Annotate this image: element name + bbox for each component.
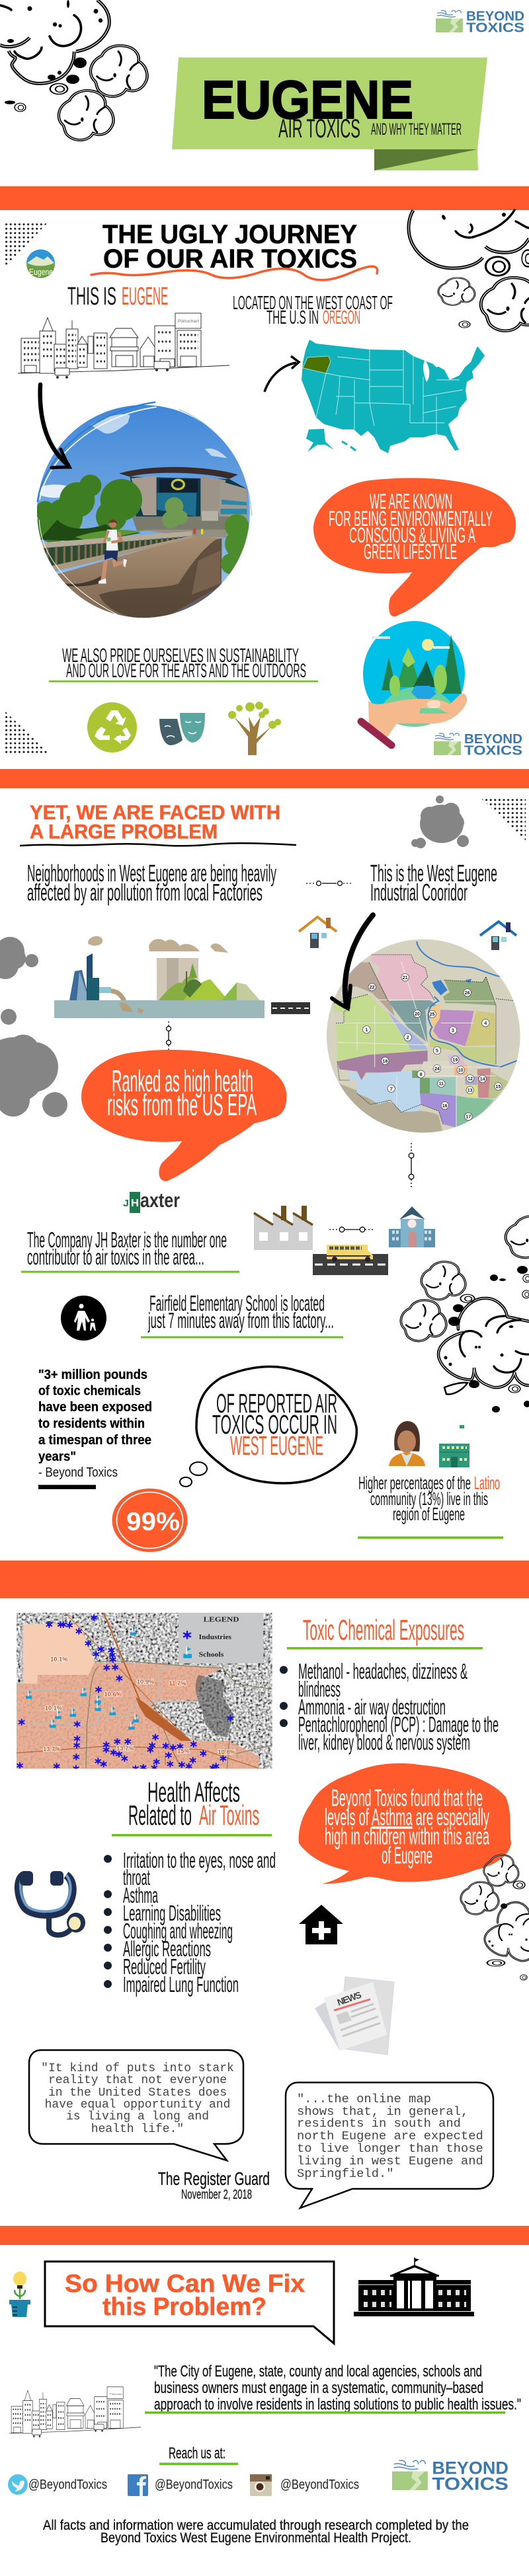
thought bubble: 99 percent of air toxics: OF REPORTED AIR	[216, 1388, 337, 1418]
attribution: The Register Guard: November 2, 2018	[181, 2188, 252, 2202]
text: neighborhoods: affected by air pollution from local Factories	[27, 879, 263, 906]
logo: City of Eugene: Eugene	[29, 267, 53, 277]
quote: city of Eugene	[154, 2363, 521, 2413]
quote: 3+ million pounds: "3+ million pounds	[38, 1368, 147, 1382]
list: health effects: Impaired Lung Function	[123, 1972, 239, 1997]
logo: JH Baxter	[123, 1189, 180, 1213]
icon: blue house	[480, 922, 516, 950]
connector	[167, 1021, 171, 1050]
green rule	[358, 1537, 503, 1539]
attribution: The Register Guard: The Register Guard	[158, 2168, 270, 2189]
orange band 2	[0, 769, 529, 788]
panel: toxic exposures and health: Air Toxins	[199, 1800, 259, 1831]
logo: Beyond Toxics top	[436, 9, 524, 36]
text: located on the west coast: OREGON	[323, 307, 360, 328]
illustration: polluting factory	[54, 936, 264, 1018]
map: industries and schools: 10.8%	[218, 1749, 236, 1755]
map: industries and schools: 13.7%	[43, 1746, 61, 1753]
wavy underline	[91, 266, 378, 280]
orange band 1	[0, 186, 529, 210]
smoke clouds top left	[0, 0, 147, 140]
map: Eugene neighborhoods: 21	[403, 976, 408, 980]
logo: Beyond Toxics bottom: BEYOND	[432, 2458, 509, 2478]
panel: toxic exposures and health	[17, 1613, 529, 2208]
callout: how can we fix: this Problem?	[102, 2293, 266, 2321]
icon: theatre masks	[159, 713, 205, 745]
text: pride in sustainability: WE ALSO PRIDE OURSELVES IN SUSTAINABILITY	[62, 645, 299, 667]
icon: green building	[439, 1425, 469, 1467]
quote: 3+ million pounds: years"	[38, 1450, 76, 1464]
text: this is eugene: THIS IS	[67, 283, 116, 311]
panel: the ugly journey: EUGENE	[122, 283, 168, 311]
heading: health affects: Related to	[128, 1800, 192, 1831]
map: Eugene neighborhoods: 20	[415, 1012, 420, 1017]
dot triangle	[5, 712, 52, 755]
logo: JH Baxter: H	[131, 1198, 139, 1209]
map: industries and schools: Schools	[199, 1652, 224, 1659]
text: instagram handle: @BeyondToxics	[280, 2478, 359, 2492]
quote box: stark reality: have equal opportunity and	[45, 2098, 230, 2112]
icon: adult and child walking	[61, 1296, 106, 1341]
heading: yet we are faced: YET, WE ARE FACED WITH	[30, 801, 280, 824]
icon: orange house	[299, 917, 337, 948]
map: Eugene neighborhoods: 15	[495, 1085, 501, 1089]
logo: City of Eugene	[26, 250, 55, 278]
wavy underline	[20, 843, 296, 846]
icon: woman	[389, 1421, 425, 1466]
quote box: stark reality: reality that not everyone	[48, 2074, 227, 2087]
thought bubble: 99 percent of air toxics: WEST EUGENE	[230, 1430, 323, 1461]
callout: how can we fix	[45, 2262, 334, 2343]
map: Eugene neighborhoods: 25	[430, 1013, 435, 1017]
green rule	[21, 1271, 239, 1272]
road segment	[271, 1002, 310, 1014]
map: Eugene neighborhoods: 1	[365, 1028, 368, 1033]
logo: Beyond Toxics: TOXICS	[464, 744, 522, 758]
quote box: stark reality: is living a long and	[66, 2110, 209, 2123]
logo: Beyond Toxics bottom	[392, 2458, 509, 2493]
illustration: cityscape: Piktochart	[178, 319, 199, 324]
quote: 3+ million pounds	[38, 1368, 152, 1480]
speech bubble: ranked high risk: risks from the US EPA	[107, 1087, 257, 1122]
logo: Beyond Toxics: BEYOND	[464, 732, 522, 747]
logo: JH Baxter: axter	[140, 1189, 180, 1212]
connector	[409, 1143, 414, 1189]
icon: newspaper: NEWS	[336, 1989, 363, 2008]
speech bubble: asthma: of Eugene	[382, 1842, 432, 1868]
list: health effects: Coughing and wheezing	[123, 1919, 233, 1943]
map: industries and schools: 10.9%	[137, 1678, 155, 1685]
quote box: online map	[286, 2082, 493, 2208]
map: industries and schools: 10.6%	[104, 1691, 122, 1697]
list: chemicals	[280, 1659, 499, 1755]
illustration: cityscape small: Piktochart	[110, 2392, 123, 2396]
map: Eugene neighborhoods: 19	[452, 1058, 458, 1063]
map: United States	[302, 340, 485, 453]
list: health effects: Learning Disabilities	[123, 1901, 221, 1925]
heading: yet we are faced: A LARGE PROBLEM	[30, 820, 218, 843]
quote box: stark reality: "It kind of puts into stark	[41, 2062, 234, 2075]
icon: medical house	[299, 1905, 343, 1944]
thought bubble: 99 percent of air toxics	[180, 1366, 356, 1487]
map: Eugene neighborhoods: 12	[468, 1077, 473, 1082]
list: health effects: Reduced Fertility	[123, 1954, 206, 1979]
logo: Beyond Toxics bottom: TOXICS	[432, 2474, 509, 2493]
map: industries and schools: 15%	[177, 1748, 190, 1754]
text: Fairfield Elementary: Fairfield Elementary School is located	[149, 1291, 325, 1315]
list: health effects: Allergic Reactions	[123, 1936, 211, 1961]
icon: hand holding nature	[361, 621, 467, 745]
icon: newspaper	[315, 1977, 394, 2055]
illustration: cityscape small	[9, 2387, 141, 2437]
map: industries and schools: 13.7%	[116, 1745, 134, 1751]
icon: factory	[254, 1206, 313, 1250]
quote box: online map: north Eugene are expected	[297, 2129, 483, 2143]
map: Eugene neighborhoods: 13	[468, 1089, 473, 1093]
map: Eugene neighborhoods: 24	[434, 1067, 440, 1072]
logo: Beyond Toxics	[434, 732, 522, 758]
list: health effects: throat	[123, 1865, 150, 1890]
quote box: online map: residents in south and	[297, 2116, 461, 2131]
quote box: online map: living in west Eugene and	[297, 2154, 483, 2168]
green rule	[141, 1336, 343, 1339]
text: neighborhoods	[27, 860, 276, 906]
map: Eugene neighborhoods: 18	[382, 1059, 387, 1064]
text: facebook handle: @BeyondToxics	[155, 2478, 233, 2492]
dot triangle	[5, 221, 49, 267]
panel: large problem	[0, 795, 529, 1552]
dot triangle	[480, 797, 526, 841]
quote box: online map: to live longer than those	[297, 2141, 483, 2156]
list: health effects: Irritation to the eyes, nose and	[123, 1848, 276, 1872]
map: Eugene neighborhoods: 3	[452, 1029, 454, 1033]
map: Eugene neighborhoods: 16	[442, 1104, 448, 1109]
logo: Beyond Toxics top: BEYOND	[466, 9, 524, 24]
text: Fairfield Elementary: just 7 minutes away from this factory...	[147, 1308, 334, 1333]
text: JH Baxter contributor	[27, 1228, 227, 1269]
heading: health affects	[128, 1777, 259, 1831]
icon: tree	[228, 702, 281, 755]
icon: facebook	[128, 2474, 148, 2496]
panel: header	[0, 0, 524, 170]
text: located on the west coast: THE U.S IN	[266, 307, 319, 328]
big arrow to map	[332, 915, 373, 1008]
title banner	[172, 57, 487, 170]
heading: the ugly journey	[102, 220, 357, 274]
heading: health affects: Health Affects	[147, 1777, 240, 1808]
text: reach us at: Reach us at:	[169, 2445, 225, 2462]
icon: light bulb plant	[9, 2271, 30, 2317]
heading: yet we are faced	[30, 801, 280, 843]
map: Eugene neighborhoods: 10	[458, 1068, 464, 1073]
quote box: online map: "...the online map	[297, 2092, 431, 2106]
stat: 99 percent: 99%	[126, 1508, 180, 1536]
speech bubble: known for	[313, 478, 516, 616]
stat: 99 percent	[112, 1489, 188, 1552]
smoke clouds top right	[409, 210, 529, 331]
green rule	[159, 2463, 238, 2465]
map: Eugene neighborhoods: 22	[370, 986, 375, 990]
map: Eugene neighborhoods: 14	[480, 1078, 485, 1082]
quote box: stark reality: health life."	[91, 2123, 184, 2136]
icon: recycle	[87, 702, 137, 753]
quote: 3+ million pounds: - Beyond Toxics	[38, 1465, 118, 1480]
arrow to Oregon	[264, 356, 299, 392]
quote: 3+ million pounds: to residents within	[38, 1417, 145, 1431]
smoke clouds right	[401, 1216, 529, 1413]
callout: how can we fix: So How Can We Fix	[65, 2270, 305, 2298]
quote box: stark reality: in the United States does	[48, 2086, 227, 2100]
green rule	[287, 1647, 483, 1649]
quote box: online map: Springfield."	[297, 2166, 394, 2181]
logo: JH Baxter: J	[123, 1198, 129, 1209]
heading: the ugly journey: THE UGLY JOURNEY	[102, 220, 357, 249]
quote box: stark reality	[29, 2050, 243, 2160]
attribution: The Register Guard	[158, 2168, 270, 2202]
logo: Beyond Toxics top: TOXICS	[466, 21, 524, 36]
brush ring around photo	[38, 402, 253, 616]
green rule	[112, 1834, 272, 1837]
big arrow to photo	[40, 385, 69, 468]
map: industries and schools	[17, 1613, 272, 1772]
green rule	[49, 681, 318, 682]
map: Eugene neighborhoods: 8	[420, 1072, 423, 1077]
connector	[329, 1227, 375, 1232]
map: Eugene neighborhoods: 17	[466, 1115, 471, 1120]
map: Eugene neighborhoods: 2	[407, 1036, 409, 1041]
quote box: online map: shows that, in general,	[297, 2104, 468, 2119]
list: health effects	[104, 1848, 276, 1997]
icon: bus on road	[313, 1245, 388, 1275]
quote: 3+ million pounds: a timespan of three	[38, 1433, 151, 1448]
icon: white house	[354, 2258, 474, 2316]
text: twitter handle: @BeyondToxics	[28, 2478, 107, 2492]
text: latino community: Latino	[474, 1473, 500, 1493]
text: west eugene industrial corridor	[370, 860, 497, 906]
quote: 3+ million pounds: of toxic chemicals	[38, 1383, 141, 1398]
panel: large problem: The Company JH Baxter is the number one	[27, 1228, 227, 1252]
text: JH Baxter contributor: contributor to air toxics in the area...	[27, 1245, 204, 1269]
text: Fairfield Elementary	[147, 1291, 334, 1333]
gray smoke cloud	[411, 795, 469, 848]
map: Eugene neighborhoods: 26	[465, 991, 470, 996]
map: Eugene neighborhoods: 5	[436, 1049, 438, 1054]
panel: how can we fix	[8, 2258, 521, 2546]
map: industries and schools: Industries	[199, 1634, 231, 1641]
map: industries and schools: 10.1%	[50, 1656, 68, 1662]
gray smoke clouds left	[0, 937, 67, 1117]
icon: stethoscope	[19, 1871, 85, 1935]
subtitle: air toxics: AIR TOXICS	[278, 114, 360, 143]
quote: 3+ million pounds: have been exposed	[38, 1400, 152, 1415]
text: pride in sustainability	[62, 645, 306, 682]
text: latino community	[358, 1473, 500, 1524]
speech bubble: ranked high risk	[81, 1050, 286, 1181]
photo: Autzen stadium and runner	[35, 403, 253, 619]
map: Eugene neighborhoods: 11	[439, 1082, 444, 1087]
footer: sources note	[43, 2518, 469, 2546]
footer: sources note: Beyond Toxics West Eugene Environmental Health Project.	[101, 2530, 411, 2546]
footer: sources note: All facts and information were accumulated through research completed by the	[43, 2518, 469, 2533]
smoke clouds right	[461, 1855, 529, 1980]
speech bubble: ranked high risk: Ranked as high health	[112, 1064, 253, 1098]
map: industries and schools: 11.7%	[169, 1680, 186, 1687]
map: Eugene neighborhoods	[324, 935, 524, 1134]
orange band 3	[0, 1561, 529, 1598]
map: Eugene neighborhoods: 4	[484, 1021, 487, 1026]
panel: the ugly journey	[5, 210, 529, 758]
illustration: cityscape	[18, 313, 229, 379]
list: chemicals: blindness	[298, 1677, 341, 1701]
icon: instagram	[250, 2474, 272, 2496]
green rule	[145, 2411, 505, 2414]
black rule	[38, 1485, 96, 1489]
connector	[306, 881, 352, 885]
map: industries and schools: 10.1%	[45, 1705, 63, 1711]
map: industries and schools: LEGEND	[204, 1616, 239, 1623]
list: health effects: Asthma	[123, 1883, 158, 1907]
map: Eugene neighborhoods: 7	[390, 1087, 393, 1091]
orange band 4	[0, 2226, 529, 2245]
speech bubble: asthma	[299, 1763, 511, 1884]
icon: twitter	[8, 2474, 28, 2495]
icon: school	[389, 1206, 435, 1247]
text: located on the west coast	[233, 293, 393, 328]
thought bubble: 99 percent of air toxics: TOXICS OCCUR IN	[212, 1409, 337, 1440]
title: EUGENE: EUGENE	[202, 70, 413, 130]
heading: the ugly journey: OF OUR AIR TOXICS	[103, 244, 357, 274]
